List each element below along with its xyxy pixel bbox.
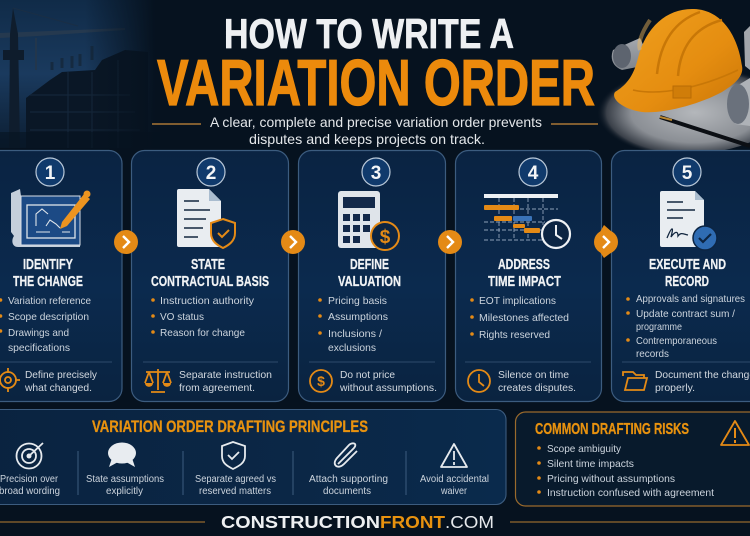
step 5 bullet list: Contremporaneous (636, 335, 717, 347)
step 2 heading (151, 257, 269, 290)
principle: separate: reserved matters (199, 486, 271, 497)
panel: step 2 state contractual basis (132, 150, 288, 402)
icon: scales of justice (145, 369, 171, 392)
step 2 bullet list: Instruction authority (160, 295, 255, 307)
step 2 tip (179, 369, 272, 394)
principle: attach (309, 474, 388, 497)
step 5 tip (655, 369, 750, 394)
principle: assumptions: State assumptions (86, 474, 164, 485)
step number 5: 5 (682, 163, 693, 184)
step 1 bullet list: Variation reference (8, 295, 91, 307)
step 3 heading: DEFINE (350, 257, 389, 273)
icon: shield with check (222, 442, 245, 469)
title (157, 10, 595, 119)
panel: common drafting risks (516, 412, 750, 506)
step 5 bullet list: records (636, 348, 669, 360)
step 2 heading: CONTRACTUAL BASIS (151, 274, 269, 290)
principle: waiver: Avoid accidental (420, 474, 489, 485)
step 4 tip (498, 369, 576, 394)
icon: dollar circle (310, 370, 332, 392)
principle: attach: documents (323, 486, 371, 497)
principle: assumptions (86, 474, 164, 497)
step 3 bullet list: Inclusions / (328, 328, 382, 340)
principle: precision: broad wording (0, 486, 60, 497)
principle: separate: Separate agreed vs (195, 474, 276, 485)
icon: clock (468, 370, 490, 392)
step 5 heading: RECORD (665, 274, 709, 290)
icon: document with shield (177, 189, 235, 248)
icon: warning triangle (441, 444, 467, 467)
step 5 tip: properly. (655, 382, 695, 394)
footer brand: CONSTRUCTION (221, 512, 380, 532)
step 2 bullet list: VO status (160, 311, 204, 323)
step 4 heading (488, 257, 561, 290)
icon: paperclip (335, 443, 357, 467)
header photo: hard hat on blueprints (587, 9, 750, 154)
step 4 bullet list: EOT implications (479, 295, 556, 307)
principle: assumptions: explicitly (106, 486, 143, 497)
arrow: step 1 to 2 (114, 230, 138, 254)
step 4 bullet list (470, 295, 569, 341)
icon: target crosshair (0, 368, 20, 392)
step 5 bullet list: Update contract sum / (636, 308, 735, 320)
principle: waiver (420, 474, 489, 497)
step 4 heading: TIME IMPACT (488, 274, 561, 290)
step 1 tip: what changed. (24, 382, 92, 394)
principle: separate (195, 474, 276, 497)
arrow: step 4 to 5 (594, 225, 618, 258)
principle: precision: Precision over (0, 474, 59, 485)
icon: target with arrow (16, 443, 43, 468)
risks heading: COMMON DRAFTING RISKS (535, 421, 689, 438)
footer brand: .COM (445, 512, 494, 532)
step 3 tip: without assumptions. (339, 382, 437, 394)
step 3 heading (338, 257, 401, 290)
arrow: step 3 to 4 (438, 230, 462, 254)
step 1 tip: Define precisely (25, 369, 98, 381)
subtitle: disputes and keeps projects on track. (249, 131, 485, 147)
risks bullet list (537, 443, 714, 499)
panel: variation order drafting principles (0, 410, 506, 504)
step number 3 (362, 158, 390, 186)
step 4 heading: ADDRESS (498, 257, 550, 273)
step 3 bullet list (318, 295, 388, 354)
icon: folder (623, 372, 647, 390)
step 3 tip (339, 369, 437, 394)
icon: orange warning triangle (721, 421, 749, 445)
step 4 bullet list: Milestones affected (479, 312, 569, 324)
principle: attach: Attach supporting (309, 474, 388, 485)
subtitle: A clear, complete and precise variation order prevents (210, 114, 542, 130)
subtitle (152, 114, 598, 147)
icon: gantt chart with clock (484, 194, 570, 248)
step 1 tip (24, 369, 98, 394)
risks bullet list: Silent time impacts (547, 458, 634, 470)
step number 1: 1 (45, 163, 56, 184)
step 2 tip: Separate instruction (179, 369, 272, 381)
panel: step 4 address time impact (456, 150, 602, 402)
step 1 heading (13, 257, 83, 290)
icon: blueprint and pencil (11, 189, 90, 247)
step 5 bullet list: programme (636, 321, 682, 333)
principle: waiver: waiver (440, 486, 468, 497)
step 1 bullet list (0, 295, 91, 354)
risks bullet list: Scope ambiguity (547, 443, 622, 455)
step 3 heading: VALUATION (338, 274, 401, 290)
step 3 bullet list: Assumptions (328, 311, 388, 323)
step 2 bullet list (151, 295, 255, 339)
icon: calculator with dollar coin: $ (380, 227, 391, 248)
arrow: step 2 to 3 (281, 230, 305, 254)
step 2 heading: STATE (191, 257, 225, 273)
step 4 tip: Silence on time (498, 369, 569, 381)
footer brand: FRONT (380, 512, 445, 532)
step number 5 (673, 158, 701, 186)
step 1 heading: IDENTIFY (23, 257, 73, 273)
step 1 bullet list: Scope description (8, 311, 89, 323)
step 5 heading: EXECUTE AND (649, 257, 726, 273)
step number 2: 2 (206, 163, 216, 184)
risks bullet list: Pricing without assumptions (547, 473, 675, 485)
title: HOW TO WRITE A (224, 10, 514, 57)
principle: precision (0, 474, 60, 497)
step 4 bullet list: Rights reserved (479, 329, 550, 341)
step 2 tip: from agreement. (179, 382, 255, 394)
step 1 heading: THE CHANGE (13, 274, 83, 290)
step 2 bullet list: Reason for change (160, 327, 245, 339)
step number 4 (519, 158, 547, 186)
step number 1 (36, 158, 64, 186)
step 1 bullet list: specifications (8, 342, 70, 354)
step number 2 (197, 158, 225, 186)
step 1 bullet list: Drawings and (8, 327, 69, 339)
step number 3: 3 (371, 163, 381, 184)
panel: step 5 execute and record (612, 150, 750, 402)
panel: step 3 define valuation (298, 150, 446, 402)
risks bullet list: Instruction confused with agreement (547, 487, 714, 499)
step 3 tip: Do not price (340, 369, 395, 381)
step 5 bullet list (626, 293, 745, 360)
step 3 bullet list: Pricing basis (328, 295, 387, 307)
step number 4: 4 (528, 163, 539, 184)
header photo: crane and building under construction (0, 0, 163, 148)
step 5 heading (649, 257, 726, 290)
panel: step 1 identify the change (0, 150, 122, 402)
step 4 tip: creates disputes. (498, 382, 576, 394)
step 3 bullet list: exclusions (328, 342, 376, 354)
icon: speech bubble (108, 442, 136, 467)
principles heading: VARIATION ORDER DRAFTING PRINCIPLES (92, 417, 368, 436)
icon: calculator with dollar coin (338, 191, 399, 250)
title: VARIATION ORDER (157, 46, 595, 119)
footer brand (0, 512, 750, 532)
icon: signed document with check (660, 191, 717, 250)
icon: dollar circle: $ (317, 373, 325, 389)
